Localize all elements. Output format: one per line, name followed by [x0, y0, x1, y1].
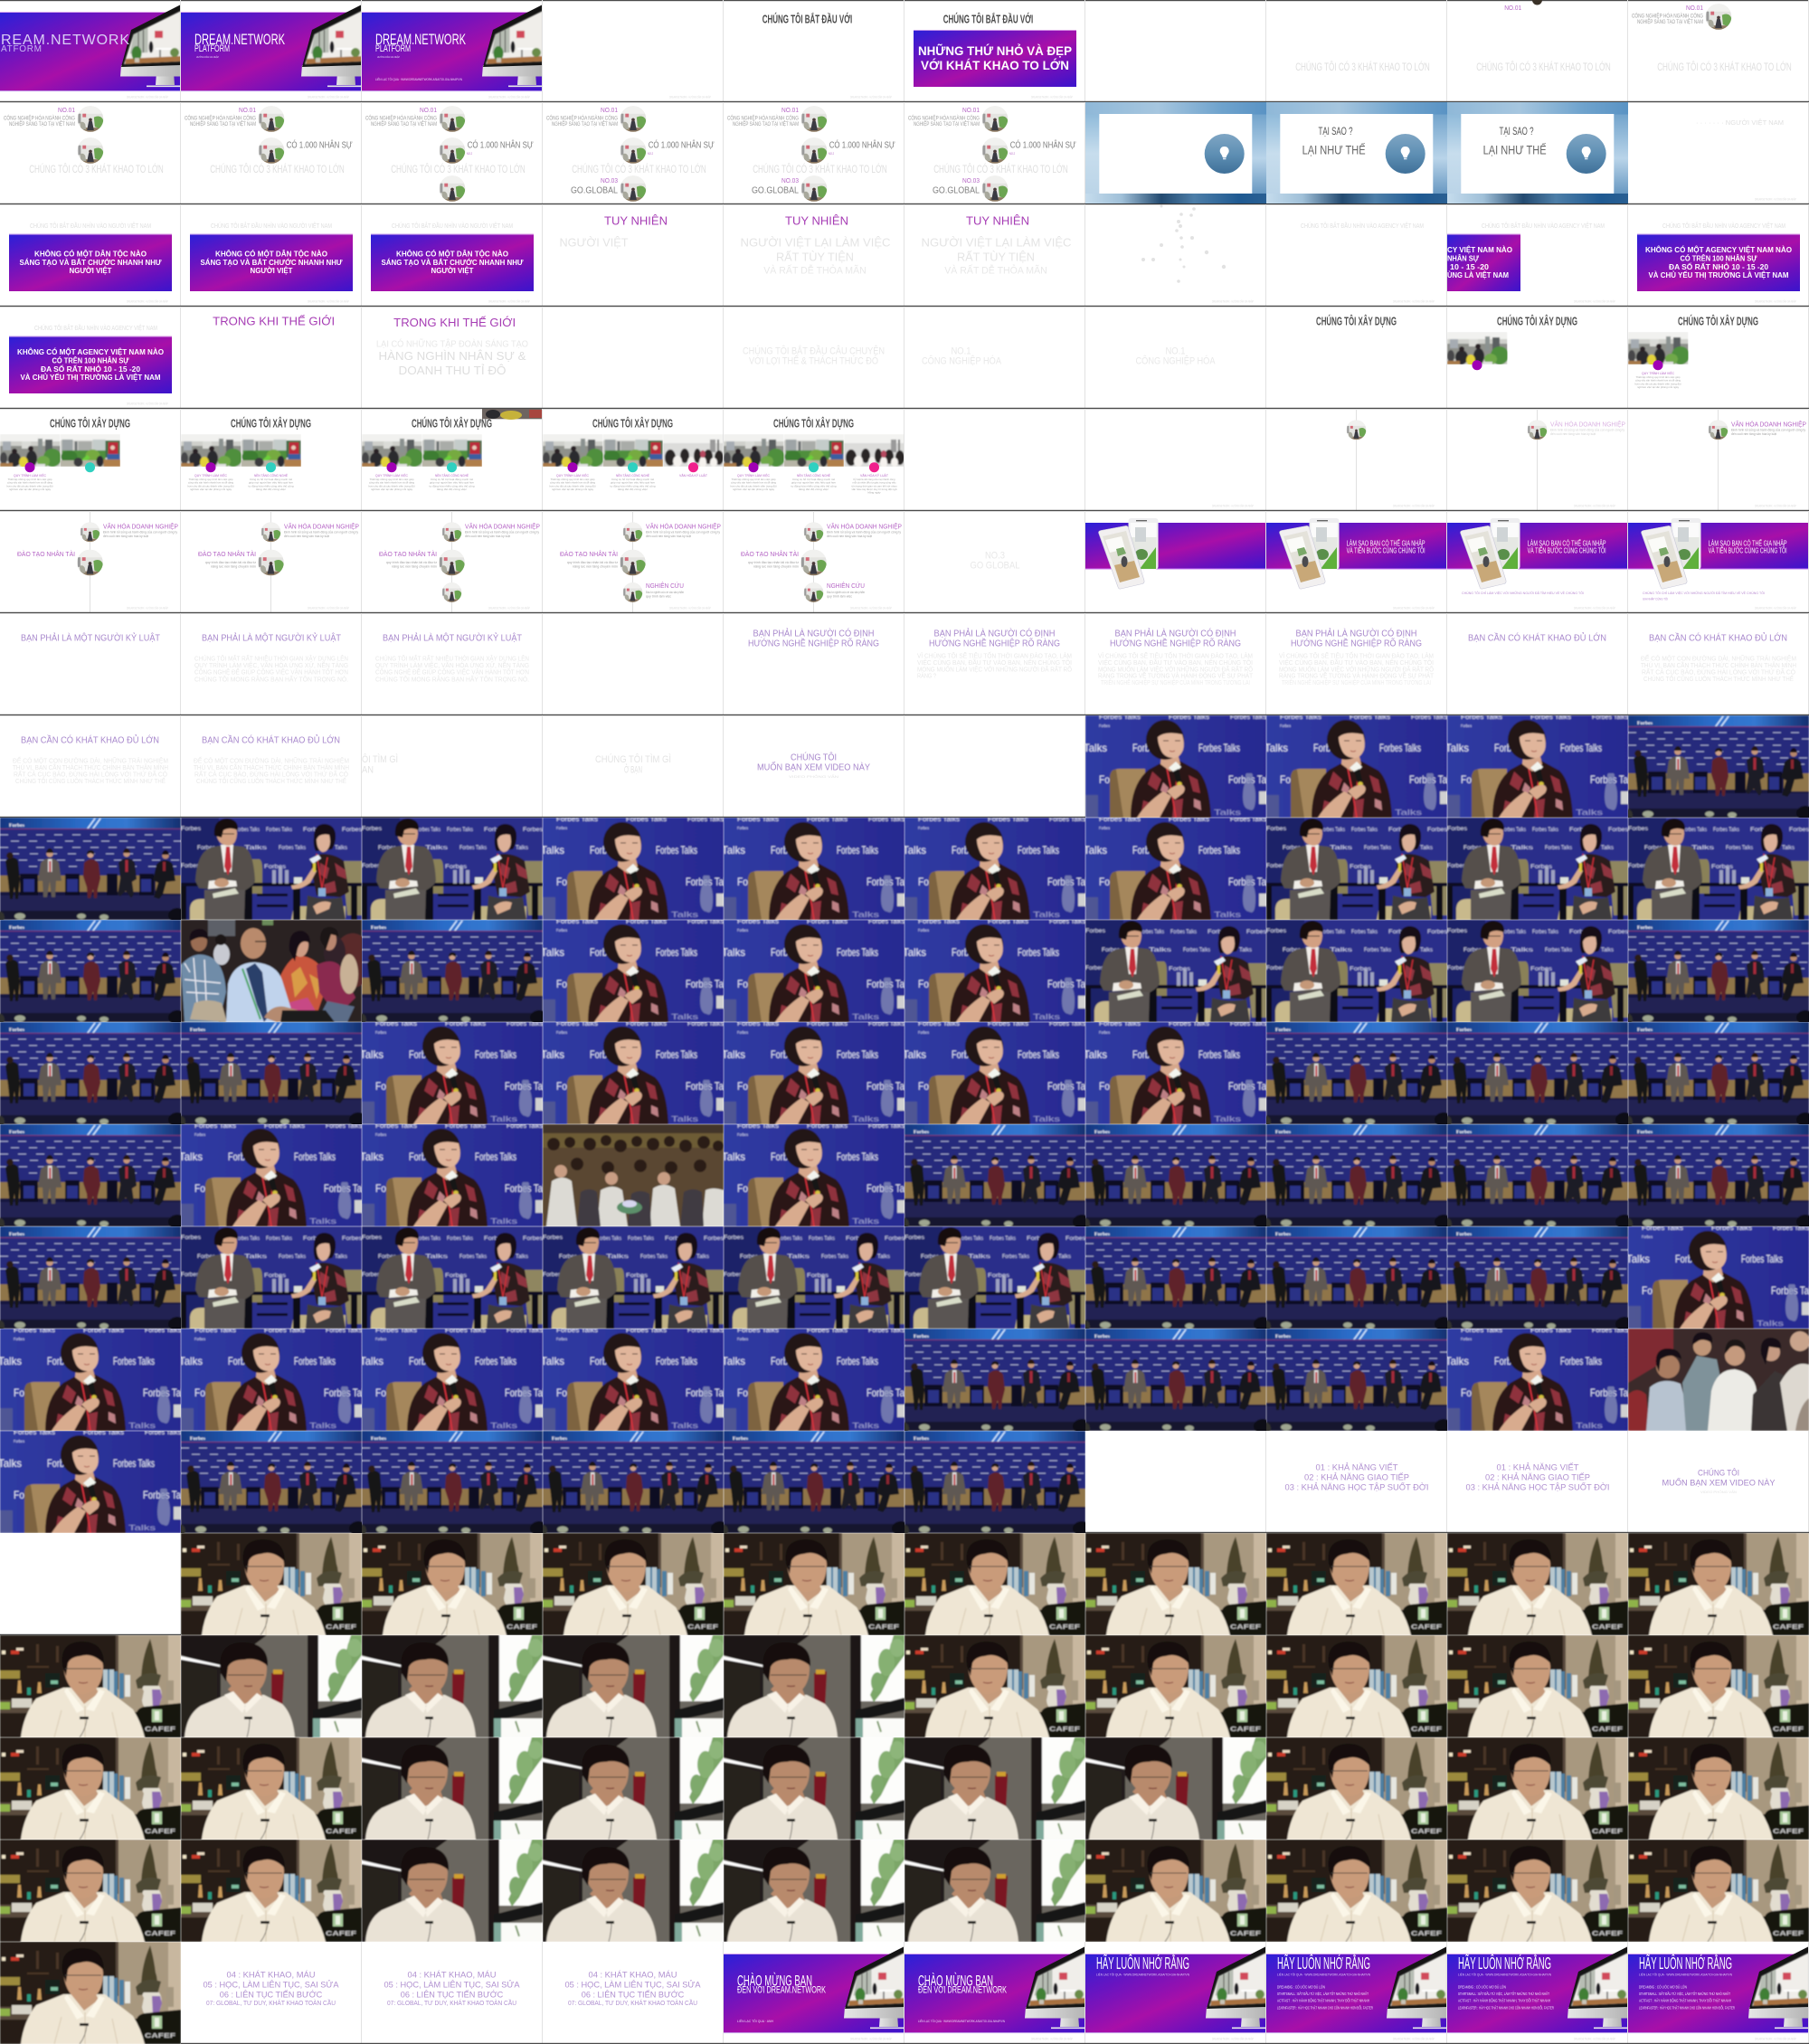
frame: khát khao list: [362, 1942, 543, 2044]
frame: xây dựng + photo + text: [1628, 307, 1809, 409]
frame: xây dựng + photo: [1447, 307, 1628, 409]
frame: văn hóa doanh nghiệp: [1628, 409, 1809, 511]
frame: chúng tôi bắt đầu với + gradient box: CHÚNG TÔI BẮT ĐẦU VỚI: [943, 13, 1033, 25]
frame: blank slide: [904, 715, 1085, 818]
frame: trong khi thế giới details: LẠI CÓ NHỮNG TẬP ĐOÀN SÁNG TẠO: [376, 338, 528, 350]
frame: NO.1 công nghiệp hóa left: [904, 307, 1085, 409]
frame: hero title with contact line: [362, 0, 543, 102]
frame: chào mừng with link: [904, 1942, 1085, 2044]
frame: NO.3 go global: NO.3: [985, 550, 1005, 561]
frame: phone band with note 2 lines: CHÚNG TÔI CHỈ LÀM VIỆC VỚI NHỮNG NGƯỜI ĐÃ TÌM HIỂU VỀ VỀ CHÚNG TÔI: [1643, 591, 1765, 595]
frame: blank slide: [1085, 1431, 1266, 1533]
frame: tìm gì sliding: ÔI TÌM GÌ: [362, 753, 398, 765]
frame: người việt nam fading in: [1628, 102, 1809, 204]
frame: muốn bạn xem video: MUỐN BẠN XEM VIDEO NÀY: [1662, 1478, 1776, 1489]
frame: phone band with note: CHÚNG TÔI CHỈ LÀM VIỆC VỚI NHỮNG NGƯỜI ĐÃ TÌM HIỂU VỀ VỀ CHÚNG TÔI: [1462, 591, 1584, 595]
frame: blank slide: [1085, 409, 1266, 511]
frame: trong khi thế giới details: TRONG KHI THẾ GIỚI: [393, 316, 516, 329]
frame: định hướng full: RÀNG TRONG VỀ TƯƠNG VÀ HÀNH ĐỘNG VỀ SỰ PHÁT: [1098, 671, 1253, 680]
frame: agency box: [1628, 204, 1809, 307]
frame: muốn bạn xem video: VIDEO PHỎNG VẤN: [1700, 1490, 1738, 1494]
frame: phone band with note: LÀM SAO BẠN CÓ THỂ GIA NHẬP: [1528, 540, 1606, 548]
frame: xây dựng two columns: [181, 409, 362, 511]
frame: hero title with contact line: LIÊN LẠC TÔI QUA · WWW.DREAMNETWORK.ASIA/TOI-GIA-NHAP/VN: [375, 77, 462, 81]
frame: tại sao: LẠI NHƯ THẾ: [1302, 143, 1366, 157]
frame: chúng tôi tìm gì ở bạn: Ở BẠN: [624, 763, 642, 775]
frame: xây dựng three columns full: [724, 409, 904, 511]
frame: third circle: [362, 511, 543, 613]
frame: tại sao: [1266, 102, 1447, 204]
frame: kỹ năng list: [1447, 1431, 1628, 1533]
frame: timeline first circle: [1266, 409, 1447, 511]
frame: định hướng full: TRIỂN NGHỀ NGHIỆP SỰ NGHIỆP CỦA MÌNH TRONG TƯƠNG LAI: [1282, 677, 1431, 686]
frame: khát khao heading: [1447, 613, 1628, 715]
frame: chào mừng with link: LIÊN LẠC TÔI QUA · WWW.DREAMNETWORK.ASIA/TOI-GIA-NHAP/VN: [918, 2019, 1005, 2023]
frame: agency box sliding in: CY VIỆT NAM NÀO: [1447, 246, 1512, 254]
frame: phone band with headline: [1266, 511, 1447, 613]
frame: muốn bạn xem video: [1628, 1431, 1809, 1533]
frame: agency box sliding in: [1447, 204, 1628, 307]
frame: 3 khát khao with NO.01 entering: [1447, 0, 1628, 102]
frame: câu chuyện: VỚI LỢI THẾ & THÁCH THỨC ĐÓ: [749, 355, 878, 366]
frame: tại sao: LẠI NHƯ THẾ: [1483, 143, 1547, 157]
frame: chúng tôi bắt đầu với + gradient box: VỚI KHÁT KHAO TO LỚN: [921, 57, 1069, 72]
frame: văn hóa fading in: [1447, 409, 1628, 511]
frame: agency box sliding in: ÙNG LÀ VIỆT NAM: [1447, 271, 1509, 279]
frame: NO.1 công nghiệp hóa left: CÔNG NGHIỆP HÓA: [922, 355, 1002, 366]
frame: trong khi thế giới details: HÀNG NGHÌN NHÂN SỰ &: [378, 349, 526, 363]
frame: kỷ luật body: [181, 613, 362, 715]
frame: third circle: [362, 102, 543, 204]
frame: chào mừng: [724, 1942, 904, 2044]
frame: chúng tôi bắt đầu với + gradient box: NHỮNG THỨ NHỎ VÀ ĐẸP: [918, 43, 1072, 58]
frame: câu chuyện: [724, 307, 904, 409]
frame: định hướng full: RÀNG TRONG VỀ TƯƠNG VÀ HÀNH ĐỘNG VỀ SỰ PHÁT: [1279, 671, 1434, 680]
frame: định hướng full: [1266, 613, 1447, 715]
frame: tại sao: [1447, 102, 1628, 204]
video: man final frame: [0, 1942, 181, 2044]
frame: tìm gì sliding: [362, 715, 543, 818]
frame: khát khao list: [181, 1942, 362, 2044]
frame: trong khi thế giới: TRONG KHI THẾ GIỚI: [213, 314, 335, 327]
frame: trong khi thế giới: [181, 307, 362, 409]
frame: blank slide: [543, 613, 724, 715]
frame: hero intro with spaced title: REAM.NETWORK: [1, 33, 129, 48]
frame: hãy luôn nhớ rằng list: [1266, 1942, 1447, 2044]
frame: tìm gì sliding: AN: [362, 765, 374, 776]
frame: go.global: [543, 102, 724, 204]
frame: nghiên cứu: [543, 511, 724, 613]
frame: go.global: [904, 102, 1085, 204]
frame: hãy luôn nhớ rằng list: [1447, 1942, 1628, 2044]
frame: agency box sliding in: NHÂN SỰ: [1447, 254, 1479, 262]
frame: chúng tôi xây dựng: [1266, 307, 1447, 409]
frame: xây dựng three columns: [543, 409, 724, 511]
frame: phone band with note: VÀ TIẾN BƯỚC CÙNG CHÚNG TÔI: [1528, 545, 1606, 554]
frame: muốn bạn xem video: CHÚNG TÔI: [791, 751, 837, 762]
frame: NO.1 công nghiệp hóa center: CÔNG NGHIỆP HÓA: [1136, 355, 1216, 366]
frame: phone band with headline: LÀM SAO BẠN CÓ THỂ GIA NHẬP: [1347, 540, 1425, 548]
frame: tuy nhiên người việt: [543, 204, 724, 307]
frame: đào tạo nhân tài text: [181, 511, 362, 613]
video row 12: [0, 1123, 1809, 1229]
frame: định hướng body: RÀNG ?: [917, 672, 936, 680]
frame: hero title: [181, 0, 362, 102]
video row 8: [1084, 714, 1809, 820]
frame: 3 khát khao with NO.01: [1628, 0, 1809, 102]
frame: người việt nam fading in: · · · · · · · NGƯỜI VIỆT NAM: [1696, 118, 1784, 127]
frame: khát khao body: [0, 715, 181, 818]
frame: chúng tôi tìm gì ở bạn: CHÚNG TÔI TÌM GÌ: [595, 753, 671, 765]
frame: tuy nhiên người việt: NGƯỜI VIỆT: [559, 236, 629, 250]
frame: hãy luôn nhớ rằng: [1085, 1942, 1266, 2044]
frame: chúng tôi bắt đầu với: [724, 0, 904, 102]
frame: chúng tôi tìm gì ở bạn: [543, 715, 724, 818]
frame: dân tộc box: [362, 204, 543, 307]
frame: trong khi thế giới details: [362, 307, 543, 409]
frame: định hướng heading: [724, 613, 904, 715]
frame: phone band with headline: VÀ TIẾN BƯỚC CÙNG CHÚNG TÔI: [1347, 545, 1425, 554]
frame: phone band with note: [1447, 511, 1628, 613]
frame: blue border empty: [1085, 102, 1266, 204]
video row 19: [0, 1840, 1809, 1942]
frame: nghiên cứu: [724, 511, 904, 613]
frame: 1.000 nhân sự: [181, 102, 362, 204]
frame: định hướng body: [904, 613, 1085, 715]
frame: phone band with note 2 lines: GIA NHẬP CÙNG TÔI: [1643, 597, 1668, 601]
frame: xây dựng two columns: [0, 409, 181, 511]
frame: go.global: [724, 102, 904, 204]
video row 17: [0, 1635, 1809, 1737]
frame: phone band with note 2 lines: [1628, 511, 1809, 613]
frame: kỹ năng list: [1266, 1431, 1447, 1533]
frame: blank slide: [1085, 0, 1266, 102]
frame: NO.01 with second circle: [0, 102, 181, 204]
video row 18: [0, 1737, 1809, 1840]
frame: chào mừng: LIÊN LẠC TÔI QUA · ANH: [737, 2019, 773, 2023]
frame: tuy nhiên: [904, 204, 1085, 307]
video row 9: [0, 817, 1809, 923]
frame: kỷ luật heading: [0, 613, 181, 715]
frame: particles: [1085, 204, 1266, 307]
frame: blank slide: [543, 307, 724, 409]
frame: xây dựng with incoming photo: [362, 409, 543, 511]
frame: muốn bạn xem video: CHÚNG TÔI: [1698, 1469, 1739, 1478]
frame: câu chuyện: CHÚNG TÔI BẮT ĐẦU CÂU CHUYỆN: [743, 345, 885, 357]
video row 14: [0, 1328, 1809, 1434]
frame: blank slide: [904, 409, 1085, 511]
video row 11: [0, 1021, 1809, 1127]
frame: tại sao: TẠI SAO ?: [1319, 125, 1353, 137]
frame: tuy nhiên: [724, 204, 904, 307]
frame: NO.3 go global: GO GLOBAL: [970, 560, 1020, 571]
frame: hero intro with spaced title: [0, 0, 181, 102]
frame: agency heading: [1266, 204, 1447, 307]
frame: blank slide: [543, 0, 724, 102]
frame: đào tạo nhân tài: [0, 511, 181, 613]
frame: chúng tôi bắt đầu với: CHÚNG TÔI BẮT ĐẦU VỚI: [762, 13, 852, 25]
frame: NO.1 công nghiệp hóa center: [1085, 307, 1266, 409]
frame: 3 khát khao with NO.01 entering: NO.01: [1504, 5, 1521, 12]
frame: blank slide: [0, 1533, 181, 1635]
frame: định hướng full: [1085, 613, 1266, 715]
frame: chúng tôi bắt đầu với + gradient box: [904, 0, 1085, 102]
frame: agency box sliding in: 10 - 15 -20: [1450, 263, 1490, 271]
frame: muốn bạn xem video: [724, 715, 904, 818]
frame: dân tộc box: [181, 204, 362, 307]
frame: định hướng full: TRIỂN NGHỀ NGHIỆP SỰ NGHIỆP CỦA MÌNH TRONG TƯƠNG LAI: [1101, 677, 1250, 686]
frame: muốn bạn xem video: MUỐN BẠN XEM VIDEO NÀY: [757, 761, 870, 773]
frame: khát khao body: [181, 715, 362, 818]
frame: kỷ luật body: [362, 613, 543, 715]
video row 15: [0, 1430, 1091, 1536]
video row 16: [181, 1533, 1809, 1635]
frame: phone band: [1085, 511, 1266, 613]
frame: khát khao list: [543, 1942, 724, 2044]
frame: NO.1 công nghiệp hóa center: NO.1: [1165, 345, 1185, 356]
frame: trong khi thế giới details: DOANH THU TỈ ĐÔ: [398, 364, 507, 377]
video row 10: [0, 919, 1809, 1025]
frame: tại sao: TẠI SAO ?: [1500, 125, 1534, 137]
frame: agency box: [0, 307, 181, 409]
video row 13: [0, 1225, 1809, 1331]
frame: dân tộc box: [0, 204, 181, 307]
frame: NO.1 công nghiệp hóa left: NO.1: [952, 345, 971, 356]
frame: muốn bạn xem video: VIDEO PHỎNG VẤN: [789, 774, 839, 779]
frame: hero intro with spaced title: ATFORM: [1, 44, 42, 54]
frame: 3 khát khao heading: [1266, 0, 1447, 102]
frame: hãy luôn nhớ rằng list: [1628, 1942, 1809, 2044]
frame: khát khao body: [1628, 613, 1809, 715]
frame: NO.3 go global: [904, 511, 1085, 613]
